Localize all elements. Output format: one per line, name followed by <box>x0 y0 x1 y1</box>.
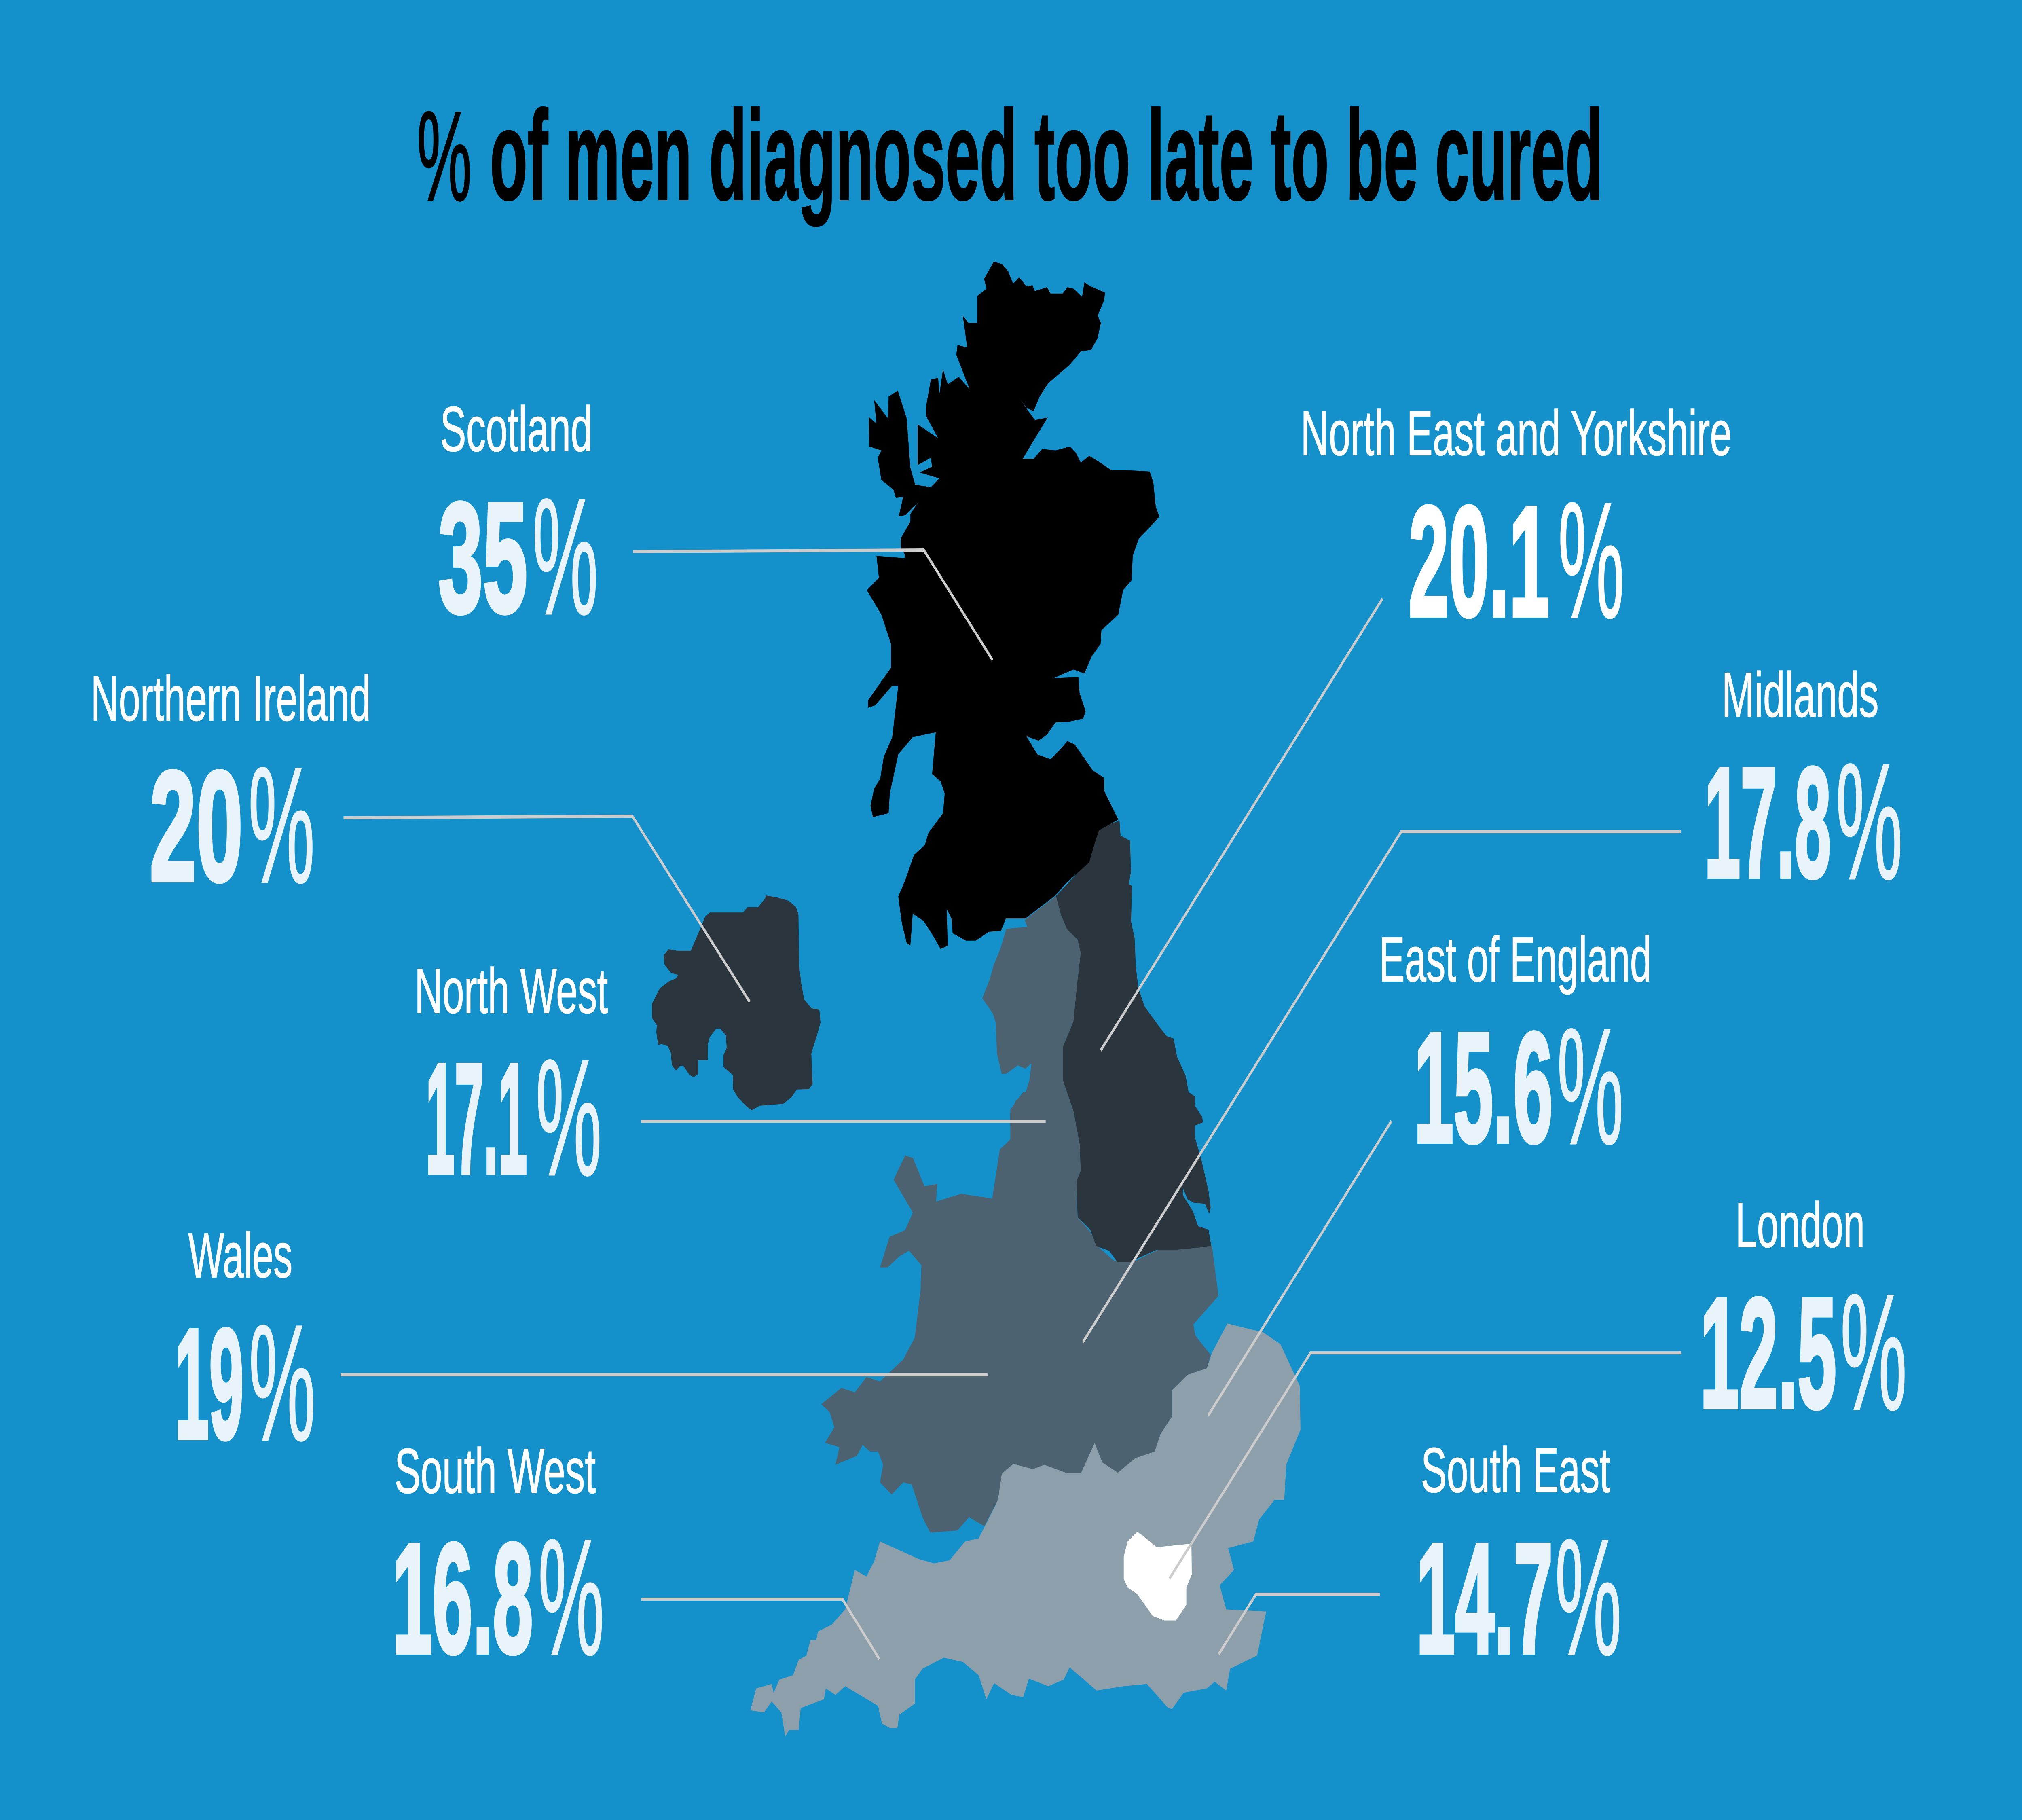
callout: North East and Yorkshire <box>1101 397 1732 1050</box>
map of the UK <box>652 262 1301 1737</box>
value: % <box>532 465 598 650</box>
value: 20 <box>150 739 243 914</box>
value: % <box>538 1505 604 1690</box>
value: 35 <box>438 470 527 645</box>
callout: North West <box>415 955 1046 1211</box>
leader line <box>1208 1121 1392 1416</box>
label: London <box>1735 1189 1865 1261</box>
value: % <box>1557 995 1624 1179</box>
leader line <box>641 1599 879 1659</box>
label: Midlands <box>1722 659 1879 730</box>
title: % <box>417 85 472 227</box>
value: 15.6 <box>1414 1000 1553 1175</box>
label: South East <box>1421 1434 1610 1506</box>
region: Northern Ireland <box>652 895 821 1110</box>
leader line <box>1219 1594 1380 1654</box>
leader line <box>343 816 750 1002</box>
value: % <box>1555 1505 1622 1690</box>
region: South West, South East and East of England <box>751 1323 1301 1737</box>
region: North East and Yorkshire <box>1056 821 1211 1262</box>
leader line <box>341 1373 988 1376</box>
leader line <box>1101 599 1383 1050</box>
value: 12.5 <box>1700 1266 1836 1441</box>
label: East of England <box>1379 923 1652 995</box>
title: of men diagnosed too late to be cured <box>490 84 1603 227</box>
value: 16.8 <box>392 1511 533 1686</box>
value: % <box>1836 730 1903 914</box>
value <box>438 465 598 650</box>
value: % <box>1558 468 1624 653</box>
value: % <box>248 733 315 918</box>
leader line <box>1170 1353 1681 1579</box>
region: London <box>1124 1532 1192 1620</box>
label: Northern Ireland <box>91 662 371 734</box>
callout: South East <box>1219 1434 1622 1690</box>
region: North West, Wales and Midlands <box>821 896 1218 1533</box>
label: South West <box>395 1435 596 1507</box>
value: % <box>249 1291 316 1476</box>
leader line <box>641 1120 1046 1123</box>
value: 19 <box>175 1296 243 1472</box>
callout: Wales <box>175 1219 988 1476</box>
leader line <box>633 550 992 660</box>
label: Scotland <box>440 393 592 465</box>
value: 17.1 <box>426 1031 527 1206</box>
callout: Northern Ireland <box>91 662 750 1002</box>
value <box>150 733 315 918</box>
callout: Scotland <box>438 393 992 660</box>
leader line <box>1083 832 1681 1342</box>
value: % <box>535 1026 602 1211</box>
value: 17.8 <box>1704 735 1831 910</box>
label: Wales <box>188 1219 292 1291</box>
value: 14.7 <box>1416 1511 1553 1686</box>
value: % <box>1840 1260 1907 1445</box>
label: North West <box>415 955 608 1026</box>
callout: Midlands <box>1083 659 1903 1342</box>
callout: London <box>1170 1189 1907 1579</box>
label: North East and Yorkshire <box>1301 397 1732 469</box>
value: 20.1 <box>1409 474 1549 649</box>
callout: East of England <box>1208 923 1652 1416</box>
callout: South West <box>392 1435 879 1690</box>
region: Scotland <box>867 262 1159 949</box>
